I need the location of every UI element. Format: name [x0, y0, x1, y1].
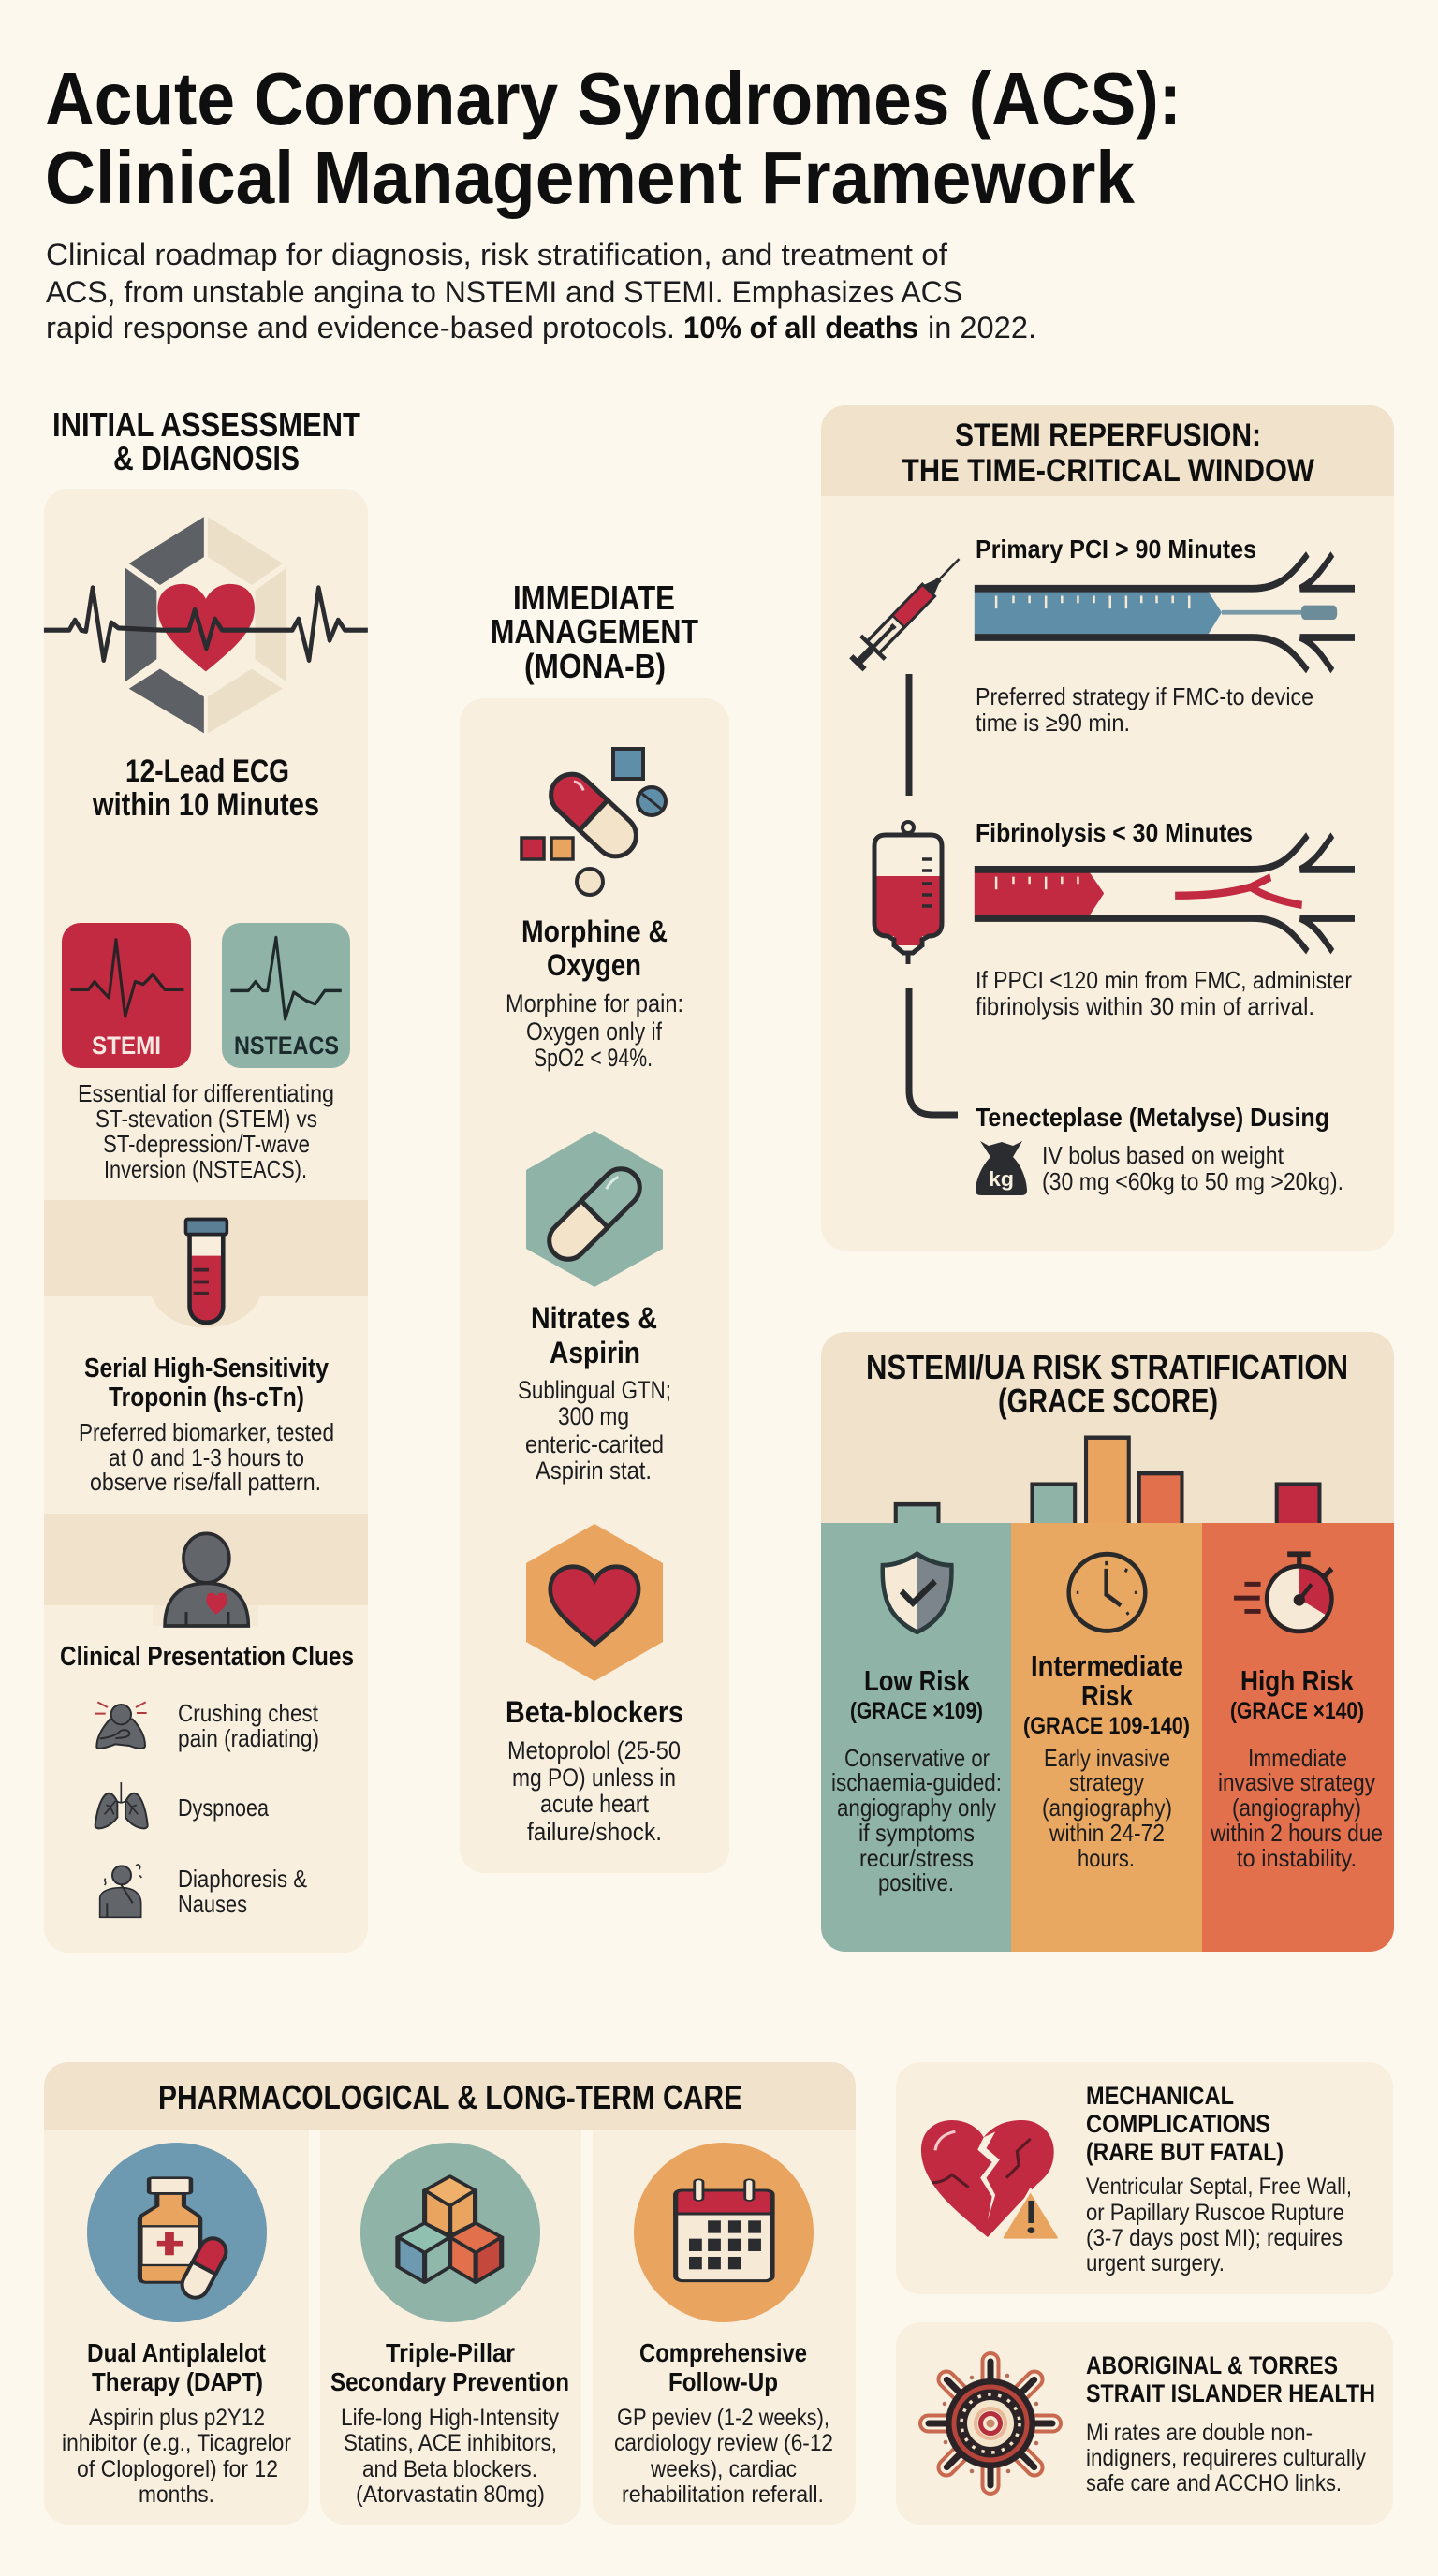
heading: 12-lead ECG	[92, 754, 319, 823]
intro text	[46, 238, 1036, 344]
panel: initial assessment and diagnosis	[44, 489, 368, 1953]
text: morphine and oxygen: SpO2 < 94%.	[534, 1044, 653, 1072]
column: intermediate risk: hours.	[1078, 1844, 1135, 1872]
card: follow-up	[614, 2143, 833, 2508]
block: tenecteplase dosing: (30 mg <60kg to 50 mg >20kg).	[1042, 1167, 1343, 1195]
column: intermediate risk: Intermediate	[1031, 1649, 1183, 1682]
icon: broken heart with warning	[921, 2120, 1064, 2241]
column: high risk: within 2 hours due	[1210, 1819, 1383, 1847]
column: intermediate risk: Early invasive	[1044, 1744, 1170, 1772]
text: nitrates and aspirin: Aspirin	[550, 1336, 640, 1369]
intro text: Clinical roadmap for diagnosis, risk stratification, and treatment of	[46, 238, 947, 271]
header band: STEMI reperfusion: STEMI REPERFUSION:	[955, 417, 1261, 453]
card: triple-pillar: Life-long High-Intensity	[341, 2405, 559, 2431]
column: intermediate risk: (GRACE 109-140)	[1023, 1713, 1190, 1739]
text: nitrates and aspirin: Sublingual GTN;	[518, 1376, 671, 1404]
header band: GRACE score: (GRACE SCORE)	[998, 1382, 1218, 1420]
icon: capsule hexagon	[526, 1131, 663, 1287]
column: high risk: (angiography)	[1232, 1793, 1361, 1822]
header band: pharmacological care: PHARMACOLOGICAL & LONG-TERM CARE	[158, 2078, 742, 2116]
text: ECG differentiation: ST-stevation (STEM) vs	[95, 1105, 317, 1133]
block: primary PCI: Preferred strategy if FMC-to device	[976, 682, 1313, 710]
heading: initial assessment: & DIAGNOSIS	[113, 439, 300, 477]
clue: chest pain	[95, 1699, 319, 1752]
text: mechanical complications: Ventricular Septal, Free Wall,	[1086, 2174, 1352, 2200]
text: nitrates and aspirin: 300 mg	[558, 1402, 629, 1430]
column: intermediate risk: strategy	[1069, 1768, 1144, 1796]
text: nitrates and aspirin: Nitrates &	[531, 1301, 657, 1335]
column: high risk: Immediate	[1248, 1744, 1347, 1772]
column: intermediate risk	[1011, 1523, 1202, 1952]
header band: STEMI reperfusion	[821, 405, 1394, 496]
text: morphine and oxygen: Morphine &	[521, 915, 668, 948]
column: high risk	[1202, 1523, 1394, 1952]
connector: bag to tenecteplase	[909, 988, 958, 1115]
column: high risk: High Risk	[1240, 1664, 1355, 1697]
icon: weight bag	[976, 1141, 1027, 1195]
text: ECG differentiation: Essential for differentiating	[78, 1079, 334, 1107]
column: low risk: positive.	[878, 1868, 954, 1896]
block: tenecteplase dosing	[976, 1103, 1343, 1195]
heading: initial assessment	[52, 405, 360, 477]
text: mechanical complications: (3-7 days post MI); requires	[1086, 2225, 1343, 2251]
text: beta-blockers: Metoprolol (25-50	[507, 1736, 681, 1764]
icon: ECG hexagon heart	[44, 517, 368, 733]
intro text: in 2022.	[928, 311, 1036, 344]
block: tenecteplase dosing: IV bolus based on weight	[1042, 1141, 1284, 1169]
panel: NSTEMI risk stratification	[821, 1332, 1394, 1952]
connector: syringe to bag	[906, 674, 912, 796]
column: high risk: (GRACE ×140)	[1230, 1698, 1364, 1724]
icon: heart hexagon	[526, 1524, 663, 1681]
text: morphine and oxygen: Morphine for pain:	[506, 989, 683, 1017]
band and icon: test tube	[44, 1200, 368, 1327]
text: troponin: at 0 and 1-3 hours to	[109, 1443, 304, 1471]
text: mechanical complications	[1086, 2082, 1352, 2276]
text: ECG differentiation: Inversion (NSTEACS).	[104, 1155, 307, 1183]
text: Aboriginal and Torres Strait Islander health: STRAIT ISLANDER HEALTH	[1086, 2379, 1375, 2408]
column: intermediate risk: within 24-72	[1049, 1819, 1165, 1847]
column: low risk: (GRACE ×109)	[850, 1698, 983, 1724]
text: beta-blockers: failure/shock.	[527, 1818, 662, 1846]
column: low risk: recur/stress	[859, 1844, 974, 1872]
card: DAPT	[62, 2143, 291, 2508]
icon: concentric sun motif	[920, 2353, 1061, 2494]
icon: stopwatch	[1234, 1554, 1331, 1632]
heading: immediate management	[491, 578, 698, 685]
block: primary PCI: Primary PCI > 90 Minutes	[976, 534, 1256, 564]
icon: calendar	[634, 2143, 814, 2322]
column: low risk: ischaemia-guided:	[831, 1768, 1002, 1796]
heading: immediate management: IMMEDIATE	[513, 578, 675, 617]
card: follow-up: Comprehensive	[639, 2338, 807, 2367]
clue: diaphoresis: Nauses	[178, 1890, 247, 1918]
title: Clinical Management Framework	[45, 136, 1135, 219]
title	[45, 57, 1181, 219]
text: Aboriginal and Torres Strait Islander health	[1086, 2351, 1375, 2496]
text: beta-blockers: acute heart	[540, 1790, 649, 1818]
card: follow-up: rehabilitation referall.	[622, 2481, 824, 2508]
intro text: ACS, from unstable angina to NSTEMI and STEMI. Emphasizes ACS	[46, 275, 962, 309]
icon: syringe	[846, 548, 971, 675]
header band: STEMI reperfusion: THE TIME-CRITICAL WINDOW	[902, 453, 1315, 489]
card: STEMI: STEMI	[92, 1032, 161, 1060]
column: low risk: if symptoms	[858, 1819, 975, 1847]
text: nitrates and aspirin: Aspirin stat.	[536, 1456, 652, 1485]
text: mechanical complications: urgent surgery.	[1086, 2250, 1225, 2276]
card: follow-up: GP peviev (1-2 weeks),	[617, 2405, 829, 2431]
text: mechanical complications: COMPLICATIONS	[1086, 2110, 1270, 2138]
heading: 12-lead ECG: within 10 Minutes	[92, 787, 319, 823]
panel: STEMI reperfusion	[821, 405, 1394, 1251]
card: follow-up: cardiology review (6-12	[614, 2430, 833, 2456]
column: intermediate risk: (angiography)	[1042, 1793, 1172, 1822]
column: low risk: angiography only	[837, 1793, 996, 1822]
intro text: rapid response and evidence-based protocols.	[46, 311, 675, 344]
text: troponin: Preferred biomarker, tested	[79, 1418, 334, 1446]
text: ECG differentiation: ST-depression/T-wave	[103, 1130, 310, 1158]
icon: IV bag	[874, 822, 942, 964]
card: triple-pillar	[330, 2143, 569, 2508]
icon: shield	[883, 1554, 951, 1632]
heading: immediate management: (MONA-B)	[524, 647, 666, 685]
bar chart: risk bars	[896, 1438, 1319, 1525]
card: DAPT: Therapy (DAPT)	[92, 2367, 263, 2396]
text: Aboriginal and Torres Strait Islander health: ABORIGINAL & TORRES	[1086, 2351, 1338, 2379]
text: morphine and oxygen: Oxygen only if	[526, 1017, 662, 1046]
heading: troponin	[84, 1354, 329, 1412]
card: triple-pillar: Secondary Prevention	[330, 2367, 569, 2396]
clue: chest pain: Crushing chest	[178, 1699, 319, 1727]
header band: pharmacological care	[44, 2062, 856, 2130]
header band: GRACE score: NSTEMI/UA RISK STRATIFICATION	[866, 1348, 1348, 1386]
clue: dyspnoea: Dyspnoea	[178, 1793, 269, 1822]
artery diagram: primary PCI	[975, 554, 1355, 671]
text: beta-blockers: mg PO) unless in	[512, 1764, 676, 1792]
text: Aboriginal and Torres Strait Islander health: safe care and ACCHO links.	[1086, 2470, 1342, 2496]
clue: dyspnoea	[95, 1782, 269, 1828]
card: triple-pillar: (Atorvastatin 80mg)	[356, 2481, 545, 2508]
block: primary PCI: time is ≥90 min.	[976, 709, 1130, 737]
block: fibrinolysis: If PPCI <120 min from FMC, administer	[976, 966, 1352, 994]
card: triple-pillar: and Beta blockers.	[362, 2456, 537, 2482]
card: follow-up: weeks), cardiac	[650, 2456, 797, 2482]
text: nitrates and aspirin: enteric-carited	[525, 1430, 664, 1458]
card: DAPT: Aspirin plus p2Y12	[89, 2405, 265, 2431]
text: troponin	[79, 1418, 334, 1496]
band and icon: patient	[44, 1514, 368, 1626]
block: primary PCI	[975, 534, 1355, 737]
heading: immediate management: MANAGEMENT	[491, 612, 698, 651]
text: nitrates and aspirin	[518, 1301, 671, 1485]
title: Acute Coronary Syndromes (ACS):	[45, 57, 1181, 140]
header band: GRACE score	[821, 1332, 1394, 1523]
card: triple-pillar: Triple-Pillar	[386, 2338, 515, 2367]
column: low risk	[821, 1523, 1011, 1952]
clue: chest pain: pain (radiating)	[178, 1724, 319, 1752]
card: STEMI	[62, 923, 191, 1068]
icon: clock	[1069, 1554, 1145, 1631]
clue: diaphoresis: Diaphoresis &	[178, 1865, 307, 1893]
text: morphine and oxygen	[506, 915, 683, 1072]
text: mechanical complications: MECHANICAL	[1086, 2082, 1234, 2110]
column: high risk: invasive strategy	[1218, 1768, 1375, 1796]
column: intermediate risk: Risk	[1081, 1679, 1134, 1712]
card: DAPT: months.	[139, 2481, 214, 2508]
text: morphine and oxygen: Oxygen	[547, 948, 641, 982]
icon: cubes	[360, 2143, 540, 2322]
intro text: 10% of all deaths	[683, 311, 918, 344]
card: DAPT: inhibitor (e.g., Ticagrelor	[62, 2430, 291, 2456]
text: ECG differentiation	[78, 1079, 334, 1183]
column: low risk: Low Risk	[864, 1664, 971, 1697]
text: beta-blockers	[506, 1695, 683, 1846]
text: beta-blockers: Beta-blockers	[506, 1695, 683, 1729]
block: fibrinolysis: Fibrinolysis < 30 Minutes	[976, 818, 1253, 847]
card: DAPT: Dual Antiplalelot	[87, 2338, 266, 2367]
column: high risk: to instability.	[1237, 1844, 1357, 1872]
card: triple-pillar: Statins, ACE inhibitors,	[344, 2430, 557, 2456]
card: NSTEACS	[222, 923, 350, 1068]
panel: mechanical complications	[896, 2062, 1393, 2294]
text: mechanical complications: (RARE BUT FATAL)	[1086, 2138, 1284, 2166]
text: Aboriginal and Torres Strait Islander health: indigners, requireres culturally	[1086, 2445, 1366, 2471]
icon: pills	[521, 749, 666, 895]
panel: Aboriginal and Torres Strait Islander health	[896, 2322, 1393, 2525]
heading: 12-lead ECG: 12-Lead ECG	[125, 754, 289, 789]
icon: weight bag: kg	[989, 1167, 1014, 1191]
block: fibrinolysis	[975, 818, 1355, 1020]
block: tenecteplase dosing: Tenecteplase (Metalyse) Dusing	[976, 1103, 1329, 1132]
card: follow-up: Follow-Up	[668, 2367, 778, 2396]
text: Aboriginal and Torres Strait Islander health: Mi rates are double non-	[1086, 2420, 1313, 2446]
icon: pill bottle	[87, 2143, 267, 2322]
card: DAPT: of Cloplogorel) for 12	[77, 2456, 278, 2482]
text: mechanical complications: or Papillary Ruscoe Rupture	[1086, 2200, 1344, 2226]
block: fibrinolysis: fibrinolysis within 30 min of arrival.	[976, 992, 1314, 1020]
heading: clinical clues: Clinical Presentation Clues	[60, 1642, 354, 1672]
heading: troponin: Serial High-Sensitivity	[84, 1354, 329, 1383]
heading: troponin: Troponin (hs-cTn)	[109, 1383, 304, 1412]
panel: pharmacological and long-term care	[44, 2062, 856, 2525]
card: NSTEACS: NSTEACS	[234, 1032, 339, 1060]
column: low risk: Conservative or	[844, 1744, 990, 1772]
text: troponin: observe rise/fall pattern.	[90, 1468, 321, 1496]
panel: immediate management	[460, 698, 729, 1873]
heading: initial assessment: INITIAL ASSESSMENT	[52, 405, 360, 444]
clue: diaphoresis	[100, 1865, 307, 1918]
artery diagram: fibrinolysis	[975, 835, 1355, 952]
